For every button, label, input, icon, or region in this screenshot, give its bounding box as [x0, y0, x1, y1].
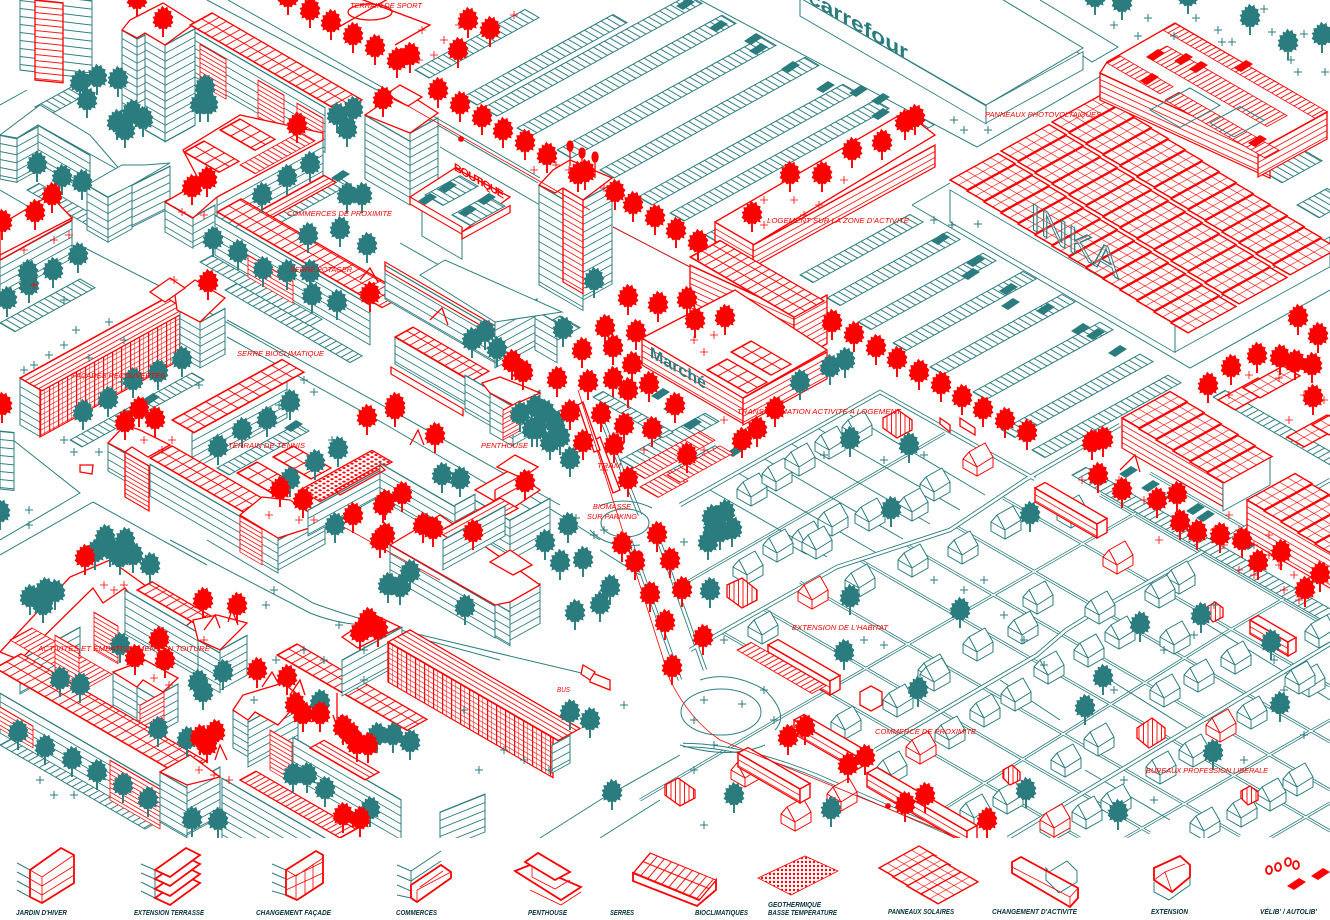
red grid facade south centre [388, 630, 580, 778]
antennae [570, 145, 595, 178]
legend: changement facade: CHANGEMENT FAÇADE [256, 910, 331, 917]
legend: changement d'activite [992, 857, 1078, 916]
labels on the map: BIOMASSE [593, 502, 632, 511]
block with balcony strip [385, 260, 562, 368]
tower with trees on roof [122, 3, 195, 142]
U-shaped red building with roof parking [1100, 23, 1327, 178]
tower top-left [20, 0, 92, 83]
block with long greenhouse [108, 425, 325, 573]
block with geothermal roof [300, 450, 475, 542]
labels on the map: BUS [557, 685, 570, 694]
legend: panneaux solaires [879, 846, 978, 916]
roundabouts [590, 501, 781, 752]
legend: velib autolib: VÉLIB' / AUTOLIB' [1260, 907, 1317, 916]
facades recouvertes block [20, 298, 188, 437]
ground solar panels right [1218, 366, 1330, 447]
legend: changement d'activite: CHANGEMENT D'ACTIVITE [992, 909, 1077, 916]
legend: geothermique basse temperature [758, 856, 838, 917]
boutique block [410, 160, 510, 259]
legend: serres bioclimatiques: SERRES [610, 910, 634, 917]
labels on the map [37, 1, 1269, 775]
legend: serres bioclimatiques: BIOCLIMATIQUES [695, 910, 748, 917]
labels on the map: ACTIVITES ET EMBATISSEMENT EN TOITURE [37, 644, 211, 653]
greenhouse block tennis [172, 360, 304, 470]
tram and bus [80, 418, 975, 690]
legend: extension: EXTENSION [1151, 909, 1189, 916]
cars [141, 0, 1260, 550]
tall red housing block [690, 240, 827, 362]
labels on the map: BUREAUX PROFESSION LIBERALE [1146, 766, 1269, 775]
south-west complex [0, 560, 222, 694]
south-west block centre [113, 660, 178, 742]
block with serre centre [391, 327, 540, 446]
legend: extension [1151, 856, 1190, 916]
labels on the map: SUR PARKING [587, 512, 637, 521]
labels on the map: LOGEMENT SUR LA ZONE D'ACTIVITE [767, 216, 910, 225]
tram line [340, 90, 960, 838]
long greenhouse block south-west [0, 654, 206, 829]
labels on the map: PANNEAUX PHOTOVOLTAIQUES [985, 110, 1101, 119]
tower centre [539, 141, 612, 311]
Marche podium: Marché [650, 342, 706, 393]
labels on the map: TERRAIN DE SPORT [350, 1, 423, 10]
legend: extension terrasse: EXTENSION TERRASSE [134, 910, 204, 917]
residential houses [733, 411, 1330, 840]
tennis courts [237, 446, 331, 495]
tower centre-north [365, 85, 438, 205]
legend: geothermique basse temperature: GEOTHERMIQUE [768, 902, 821, 909]
serre and block south centre [277, 615, 427, 730]
block cluster top-left [0, 105, 170, 242]
block south-centre [390, 498, 540, 646]
parking strips second lot [800, 214, 1181, 458]
labels on the map: TRAM [597, 461, 622, 470]
labels on the map: SERRE POTAGER [290, 265, 353, 274]
connecting block and penthouse [150, 278, 225, 368]
legend panel [0, 838, 1330, 920]
carrefour building [800, 0, 1083, 124]
legend: commerces: COMMERCES [396, 910, 437, 917]
long block with bioclimatic greenhouse [190, 13, 362, 152]
terrain de sport [330, 0, 430, 45]
labels on the map: COMMERCE DE PROXIMITE [875, 727, 977, 736]
legend: changement facade [256, 851, 331, 917]
INKA big box with solar panels [950, 96, 1330, 352]
double roads [598, 392, 1330, 838]
legend: extension terrasse [134, 848, 204, 917]
far-right block with solar panels [1247, 474, 1330, 592]
block with play structures [233, 683, 401, 840]
serre potagere block [215, 199, 406, 345]
south-west tower right [193, 615, 247, 693]
terrace block top-left edge [0, 195, 72, 298]
Marche podium [642, 290, 827, 425]
legend: commerces [396, 851, 451, 917]
left edge block [0, 431, 14, 490]
logement sur la zone d'activite [715, 112, 935, 267]
small tower bottom [440, 794, 485, 850]
labels on the map: FAÇADES RECOUVERTES [72, 371, 165, 380]
penthouse building centre [475, 455, 550, 560]
labels on the map: COMMERCES DE PROXIMITE [287, 209, 393, 218]
block with roof terrace and solar panels [165, 115, 336, 248]
parking strips top lot [415, 0, 934, 243]
red extension blocks [665, 410, 1296, 845]
legend: jardin d'hiver: JARDIN D'HIVER [16, 910, 67, 917]
right block with solar panels [1122, 392, 1272, 511]
labels on the map: TRANSFORMATION ACTIVITE A LOGEMENT [737, 407, 902, 416]
central parking red hatching [578, 402, 733, 497]
residential lot lattice [640, 415, 1330, 838]
legend: panneaux solaires: PANNEAUX SOLAIRES [888, 909, 954, 916]
legend: serres bioclimatiques [610, 853, 748, 917]
south block with hatch roof [160, 755, 356, 905]
boutique block: BOUTIQUE [454, 160, 504, 202]
INKA lettering: INKA [1030, 194, 1119, 288]
labels on the map: SERRE BIOCLIMATIQUE [237, 349, 325, 358]
houses with red extensions [731, 443, 1236, 837]
legend: velib autolib [1260, 858, 1330, 916]
legend: jardin d'hiver [16, 848, 74, 917]
legend: penthouse: PENTHOUSE [528, 910, 567, 917]
labels on the map: EXTENSION DE L'HABITAT [792, 623, 889, 632]
red roof details [204, 268, 1140, 760]
legend: geothermique basse temperature: BASSE TEMPERATURE [768, 910, 837, 917]
labels on the map: PENTHOUSE [481, 441, 529, 450]
labels on the map: TERRAIN DE TENNIS [228, 441, 305, 450]
legend: penthouse [515, 853, 581, 917]
